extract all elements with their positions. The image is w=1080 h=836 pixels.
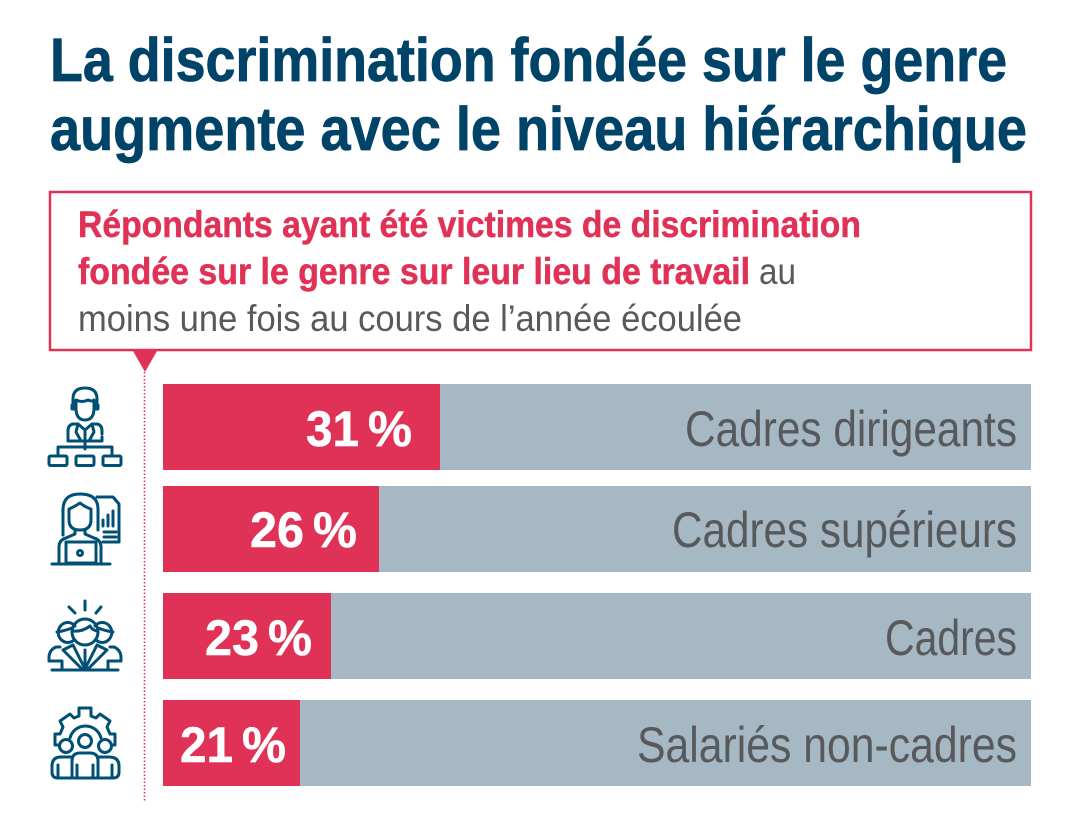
bar: Cadres supérieurs: Cadres supérieurs	[672, 502, 1017, 558]
title	[50, 26, 1027, 163]
bar: Cadres dirigeants: 31	[306, 401, 359, 457]
icon: executive with org chart	[49, 388, 121, 466]
bar: Salariés non-cadres: %	[242, 717, 286, 773]
icon: woman with laptop and report	[52, 494, 119, 564]
bar: Cadres: %	[268, 610, 312, 666]
bar: Cadres: Cadres	[885, 610, 1017, 666]
callout text: moins une fois au cours de l’année écoulée	[78, 298, 742, 339]
bar: Cadres	[163, 593, 1031, 679]
callout text: Répondants ayant été victimes de discrimination	[78, 204, 861, 245]
bar: Cadres supérieurs	[163, 486, 1031, 572]
bar chart	[163, 384, 1031, 786]
callout pointer	[133, 351, 157, 372]
bar: Cadres: 23	[205, 610, 259, 666]
callout text	[78, 204, 861, 339]
bar: Cadres dirigeants	[163, 384, 1031, 470]
bar: Cadres dirigeants: Cadres dirigeants	[685, 401, 1017, 457]
bar: Salariés non-cadres: Salariés non-cadres	[637, 717, 1017, 773]
callout text: fondée sur le genre sur leur lieu de travail	[78, 251, 750, 292]
bar: Salariés non-cadres	[163, 700, 1031, 786]
bar: Cadres supérieurs: %	[313, 502, 357, 558]
bar: Cadres dirigeants: %	[368, 401, 412, 457]
callout text: au	[759, 251, 796, 292]
bar: Salariés non-cadres: 21	[180, 717, 233, 773]
icon: team with gear	[52, 708, 119, 778]
icon: team of three with alert	[49, 601, 121, 670]
panel: description callout	[50, 192, 1031, 372]
bar: Cadres supérieurs: 26	[250, 502, 304, 558]
